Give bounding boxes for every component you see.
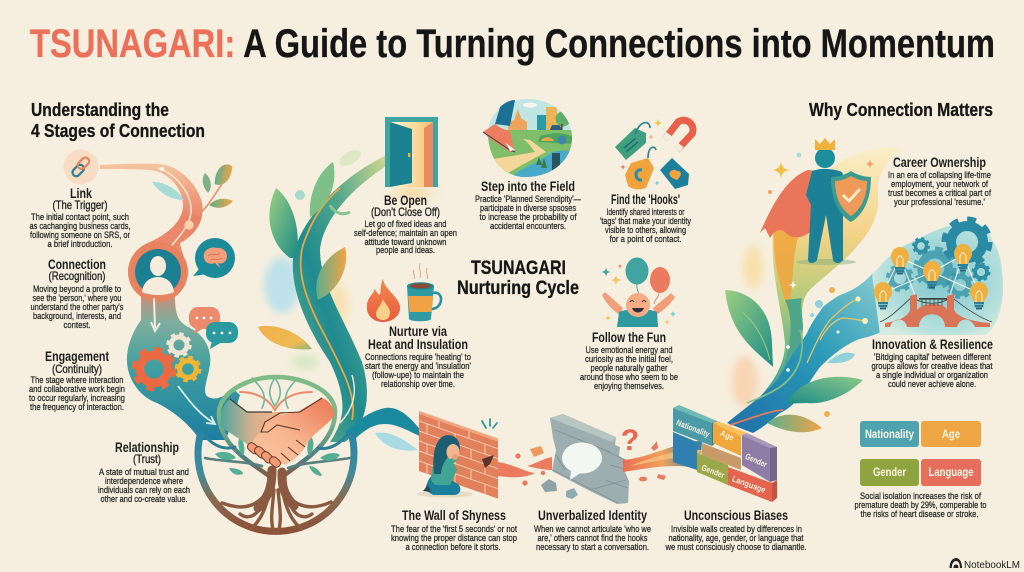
panel: Career Ownership: your professional 'resume.' — [894, 197, 985, 208]
icon: label blocks wall: Gender — [744, 451, 769, 470]
NotebookLM badge: NotebookLM — [964, 559, 1020, 571]
stage: Connection: (Recognition) — [48, 269, 106, 283]
isolation statistic — [854, 491, 986, 520]
chip: Language: Language — [928, 467, 974, 479]
panel: Be Open — [354, 117, 457, 256]
stage: Link: (The Trigger) — [52, 198, 108, 212]
ring: heart circle flowing into trunk — [219, 377, 335, 478]
icon: fragments — [515, 441, 666, 486]
panel: Be Open: Let go of fixed ideas and — [364, 219, 446, 230]
panel: Unverbalized Identity: are,' others cannot find the hooks — [538, 533, 648, 544]
panel: Follow the Fun: curiosity as the initial foel, — [585, 354, 673, 365]
icon: coffee cup — [407, 263, 441, 321]
panel: Unconscious Biases: nationality, age, gender, or language that — [668, 533, 804, 544]
stage: Engagement: to occur regularly, increasing — [29, 393, 125, 404]
panel: Career Ownership: trust becomes a critical part of — [888, 188, 991, 199]
panel: Innovation and Resilience: could never achieve alone. — [888, 379, 976, 390]
panel: Nurture via Heat and Insulation: relationship over time. — [381, 379, 455, 390]
panel: Be Open: attitude toward unknown — [364, 237, 446, 248]
hand: right arm — [252, 398, 334, 465]
stage: Relationship: other and co-create value. — [100, 494, 188, 505]
heading: nurturing cycle: TSUNAGARI — [471, 258, 566, 279]
panel: Step into the Field: to increase the probability of — [480, 212, 577, 223]
blue stream — [727, 273, 885, 433]
icon: label blocks wall: Nationality — [675, 417, 711, 439]
icon: label blocks wall: Age — [719, 428, 736, 443]
panel: Unconscious Biases — [665, 405, 806, 553]
panel: connection pathway illustration — [100, 163, 240, 440]
icon: person — [128, 242, 188, 302]
chip: Gender: Gender — [873, 467, 906, 479]
panel: Nurture via Heat and Insulation: Heat and Insulation — [368, 337, 468, 352]
stage: Relationship — [98, 440, 190, 505]
stage: Connection: Moving beyond a profile to — [33, 284, 121, 295]
vine leaves — [258, 162, 350, 349]
icon: label blocks wall: Language — [731, 473, 767, 495]
icon: open door — [374, 117, 450, 211]
stage: Connection: background, interests, and — [33, 311, 121, 322]
stage: Connection — [30, 257, 124, 331]
panel: Innovation and Resilience: a single individual or organization — [876, 370, 988, 381]
panel: Step into the Field: Practice 'Planned Serendipity'— — [475, 194, 581, 205]
vine stem — [293, 156, 388, 442]
icon: question mark: ? — [621, 424, 639, 457]
panel: Nurture via Heat and Insulation: Nurture via — [389, 324, 447, 339]
stage: Connection: Connection — [48, 257, 106, 272]
ribbon to biases — [623, 441, 702, 472]
panel: Find the Hooks: Find the 'Hooks' — [611, 192, 680, 207]
icon: label blocks wall: Gender — [700, 462, 727, 480]
panel: Step into the Field — [475, 97, 581, 232]
stage: Engagement: and collaborative work begin — [29, 384, 125, 395]
panel: Innovation and Resilience — [872, 220, 1003, 390]
panel: Be Open: self-defence; maintain an open — [354, 228, 457, 239]
panel: Innovation and Resilience: Innovation & Resilience — [872, 337, 993, 352]
heading: nurturing cycle: Nurturing Cycle — [457, 278, 579, 299]
panel: Career Ownership — [760, 138, 991, 290]
chip: Age: Age — [942, 429, 960, 441]
panel: Find the Hooks: 'tags' that make your identity — [600, 216, 691, 227]
panel: Unverbalized Identity: Unverbalized Identity — [538, 508, 647, 523]
stage: Link: as cachanging business cards, — [30, 221, 130, 232]
panel: Unconscious Biases: we must consciously choose to diamantle. — [665, 542, 806, 553]
panel: Career Ownership: Career Ownership — [893, 155, 986, 170]
stage: Relationship: Relationship — [115, 440, 179, 455]
heading: 4 stages of connection: Understanding the — [31, 100, 169, 120]
hand: fingers — [246, 441, 282, 469]
stage: Engagement: (Continuity) — [52, 362, 102, 376]
panel: The Wall of Shyness: knowing the proper distance can stop — [391, 533, 517, 544]
panel: Step into the Field: accidental encounters. — [490, 221, 566, 232]
stage: Engagement: the frequency of interaction. — [30, 402, 124, 413]
stage: Link: following someone on SRS, or — [30, 230, 131, 241]
pale washes — [732, 356, 758, 408]
panel: handshake tree — [198, 377, 354, 532]
stage: Engagement: Engagement — [45, 349, 109, 364]
icon: broken stone wall with empty speech bubble — [515, 414, 702, 504]
icon: chat bubbles — [189, 307, 238, 349]
isolation statistic: Social isolation increases the risk of — [860, 491, 981, 502]
panel: The Wall of Shyness — [391, 411, 552, 553]
panel: The Wall of Shyness: The Wall of Shyness — [402, 508, 506, 523]
icon: brain speech bubble — [193, 238, 235, 278]
panel: Find the Hooks: Identify shared interests or — [606, 207, 685, 218]
heading: 4 stages of connection: 4 Stages of Connection — [31, 121, 205, 141]
stage: Connection: see the 'person,' where you — [32, 293, 122, 304]
panel: Nurture via Heat and Insulation: (follow-upe) to maintain the — [372, 370, 464, 381]
heading: why connection matters: Why Connection Matters — [809, 100, 993, 120]
stage: Connection: contest. — [64, 320, 90, 331]
panel: Follow the Fun: Use emotional energy and — [586, 345, 672, 356]
icon: label blocks wall — [673, 405, 777, 502]
icon: brick wall with kneeling woman — [417, 411, 552, 499]
icon: joyful person with balloons — [600, 258, 677, 327]
panel: isolation chips — [854, 421, 986, 520]
panel: Nurture via Heat and Insulation: Connections require 'heating' to — [365, 352, 471, 363]
panel: growing vine — [258, 147, 428, 451]
icon: small sprout leaves — [152, 163, 233, 215]
panel: Step into the Field: Step into the Field — [481, 179, 575, 194]
stream to the wall — [345, 408, 428, 442]
stage: Link: Link — [70, 186, 92, 201]
icon: caped hero with crown and shield — [760, 138, 876, 290]
panel: Be Open: (Don't Close Off) — [371, 205, 440, 219]
hand: left arm — [220, 399, 285, 446]
stage: Engagement: The stage where interaction — [30, 375, 124, 386]
panel: Follow the Fun: around those who seem to be — [580, 372, 678, 383]
panel: Find the Hooks: for a point of contact. — [610, 234, 682, 245]
icon: shoe stepping into landscape — [483, 97, 575, 180]
panel: Step into the Field: participate in diverse spsoses — [480, 203, 576, 214]
panel: Nurture via Heat and Insulation — [365, 263, 471, 390]
leaves on the right — [725, 290, 863, 432]
panel: Follow the Fun: Follow the Fun — [592, 330, 666, 345]
panel: Unconscious Biases: Unconscious Biases — [684, 508, 788, 523]
panel: Find the Hooks — [600, 118, 693, 245]
stage: Relationship: interdependence where — [105, 476, 183, 487]
isolation statistic: premature death by 29%, comperable to — [854, 500, 986, 511]
panel: Follow the Fun: people naturally gather — [590, 363, 668, 374]
tree canopy lattice — [240, 378, 312, 410]
panel: Be Open: Be Open — [384, 193, 427, 208]
panel: Unverbalized Identity: When we cannot articulate 'who we — [534, 524, 651, 535]
stage: Engagement — [29, 349, 125, 413]
tree trunk, branches and roots — [205, 434, 350, 532]
panel: Unverbalized Identity: necessary to start a conversation. — [536, 542, 649, 553]
stage: Link: The initial contact point, such — [31, 212, 129, 223]
panel: The Wall of Shyness: The fear of the 'first 5 seconds' or not — [391, 524, 517, 535]
neck and gear blob — [127, 296, 240, 440]
panel: Innovation and Resilience: 'Bitdging capital' between different — [874, 352, 991, 363]
panel: Find the Hooks: visible to others, allowing — [605, 225, 686, 236]
icon: chain link — [64, 150, 98, 184]
stage: Relationship: A state of mutual trust and — [99, 467, 189, 478]
icon: tags and magnet — [615, 118, 693, 189]
stage: Relationship: (Trust) — [133, 452, 161, 466]
panel: Be Open: people and ideas. — [376, 245, 435, 256]
isolation statistic: the risks of heart disease or stroke. — [860, 509, 978, 520]
hero stalk — [757, 147, 903, 400]
icon: bulbs, gears and bridge network — [872, 220, 1003, 335]
panel: right flowing ribbons and hero stalk — [725, 147, 903, 433]
panel: Innovation and Resilience: groups allows for creative ideas that — [872, 361, 993, 372]
panel: Follow the Fun: enjoying themselves. — [594, 381, 664, 392]
icon: flame — [367, 279, 400, 322]
panel: Follow the Fun — [580, 258, 678, 392]
heading: 4 stages of connection — [31, 100, 205, 141]
panel: Nurture via Heat and Insulation: start the energy and 'insulation' — [365, 361, 471, 372]
panel: Career Ownership: In an era of collapsing life-time — [888, 170, 991, 181]
stage: Link: a brief introduction. — [48, 239, 112, 250]
panel: Unverbalized Identity — [515, 414, 702, 553]
stream: link to person — [100, 164, 203, 272]
stage: Relationship: individuals can rely on each — [98, 485, 190, 496]
stage: Connection: understand the other party's — [30, 302, 124, 313]
panel: Career Ownership: employment, your network of — [891, 179, 988, 190]
panel: The Wall of Shyness: a connection before it storts. — [406, 542, 500, 553]
chip: Nationality: Nationality — [865, 429, 914, 441]
ring: lower blue-brown — [198, 432, 354, 531]
panel: Unconscious Biases: Invisible walls created by differences in — [671, 524, 802, 535]
icon: gears — [135, 334, 200, 388]
heading: nurturing cycle — [457, 258, 579, 299]
stage: Link — [30, 150, 131, 250]
